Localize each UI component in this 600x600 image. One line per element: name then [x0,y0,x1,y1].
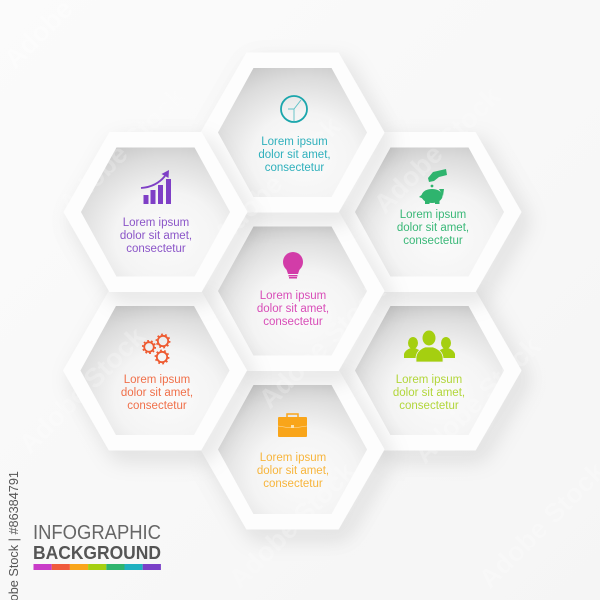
title: infographic background [33,522,161,563]
text: upper right hexagon: consectetur [403,235,463,247]
icon: briefcase [278,414,307,437]
text: lower right hexagon [393,374,465,412]
hexagon: upper right [338,132,522,292]
text: upper left hexagon [120,217,192,255]
text: lower left hexagon: Lorem ipsum [124,374,190,386]
text: upper left hexagon: dolor sit amet, [120,230,192,242]
text: lower left hexagon: dolor sit amet, [121,387,193,399]
hexagon: upper left [64,132,248,292]
hexagon: center [200,211,384,371]
text: center hexagon: Lorem ipsum [260,290,326,302]
text: upper left hexagon: consectetur [126,243,186,255]
title: infographic background: INFOGRAPHIC [33,522,161,544]
icon: hand and piggy bank [419,169,447,204]
text: upper right hexagon: Lorem ipsum [400,209,466,221]
watermarks: Adobe Stock [368,81,507,219]
hexagon: lower right [338,290,522,450]
watermarks: Adobe Stock [253,276,392,414]
text: lower left hexagon [121,374,193,412]
text: bottom hexagon: Lorem ipsum [260,452,326,464]
watermarks: Adobe Stock [208,111,347,249]
text: upper right hexagon [397,209,469,247]
text: bottom hexagon [257,452,329,490]
icon: rising bar chart [141,170,171,204]
text: lower right hexagon: consectetur [399,400,459,412]
watermarks: Adobe Stock [408,331,547,469]
watermarks: Adobe Stock [13,321,152,459]
title: infographic background: BACKGROUND [33,543,161,563]
text: bottom hexagon: dolor sit amet, [257,465,329,477]
text: upper right hexagon: dolor sit amet, [397,222,469,234]
text: top hexagon: Lorem ipsum [261,136,328,148]
watermarks: Adobe Stock [53,81,192,219]
text: bottom hexagon: consectetur [263,478,323,490]
watermarks: Adobe Stock [223,456,362,594]
text: lower right hexagon: dolor sit amet, [393,387,465,399]
hexagon: top [200,52,384,212]
icon: gears [143,334,170,364]
icon: clock [281,96,307,122]
icon: group of people [404,330,455,362]
text: top hexagon [258,136,331,174]
hexagon: bottom [200,370,384,530]
colour bar [34,564,161,570]
text: lower left hexagon: consectetur [127,400,187,412]
text: top hexagon: consectetur [265,162,324,174]
text: lower right hexagon: Lorem ipsum [396,374,462,386]
text: upper left hexagon: Lorem ipsum [123,217,189,229]
icon: light bulb [283,252,303,278]
text: top hexagon: dolor sit amet, [258,149,331,161]
text: center hexagon: consectetur [263,316,323,328]
text: center hexagon: dolor sit amet, [257,303,329,315]
text: center hexagon [257,290,329,328]
hexagon: lower left [63,290,247,450]
